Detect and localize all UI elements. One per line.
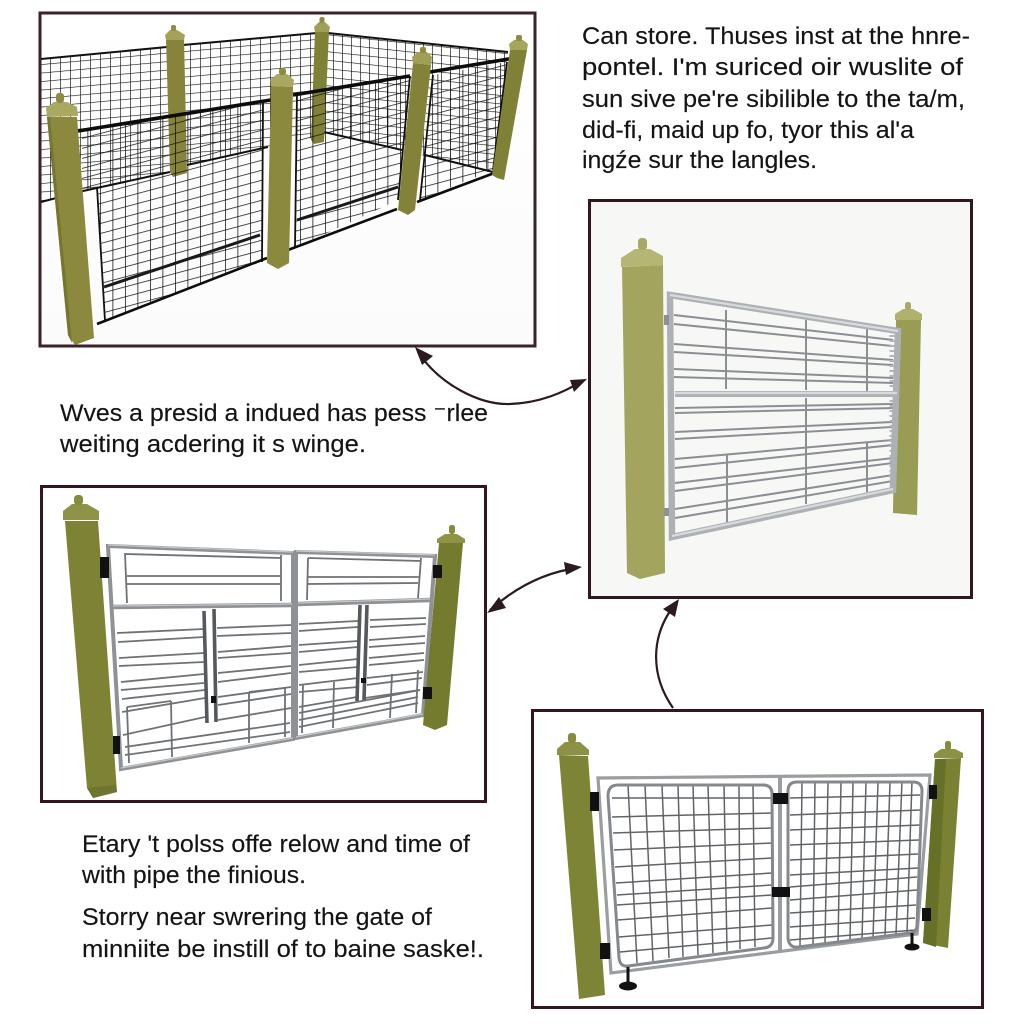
arrow: bottom right panel to gate panel: [656, 599, 679, 708]
panel: double gate with horizontal bars: [42, 486, 486, 802]
text block: middle left: Wves a presid a indued has pess ⁻rlee: [60, 400, 488, 427]
right post: [423, 525, 465, 730]
gate hinges and feet: [590, 785, 937, 990]
right leaf mesh: [790, 781, 920, 946]
text block: middle left: [59, 400, 488, 458]
gate frame: [664, 295, 898, 537]
post front left: [46, 93, 94, 345]
text block: bottom left: Etary 't polss offe relow and time of: [82, 831, 470, 858]
text block: top right: ingźe sur the langles.: [582, 147, 817, 174]
back post left: [165, 25, 187, 177]
text block: top right: sun sive pe're sibilible to the ta/m,: [582, 86, 965, 113]
text block: top right: [582, 23, 970, 174]
text block: bottom left: minniite be instill of to baine saske!.: [82, 936, 484, 963]
text block: top right: pontel. I'm suriced oir wuslite of: [582, 54, 963, 81]
front wire mesh panels: [78, 58, 515, 324]
gate frame and rounded leaves: [598, 775, 930, 973]
panel: wire mesh fence run: [40, 13, 535, 346]
left post: [63, 495, 117, 798]
post centre front: [267, 68, 294, 269]
text block: top right: did-fi, maid up fo, tyor this al'a: [582, 117, 914, 144]
gate frame: [108, 545, 435, 769]
text block: top right: Can store. Thuses inst at the hnre-: [582, 23, 970, 50]
arrow: top panel to gate panel: [415, 347, 587, 404]
text block: middle left: weiting acdering it s winge.: [59, 431, 366, 458]
right post: [923, 741, 963, 948]
right post: [893, 302, 922, 515]
text block: bottom left: Storry near swrering the gate of: [82, 904, 432, 931]
thick centre bars: [204, 605, 367, 723]
back post right: [311, 17, 330, 144]
arrow: lower left panel to gate panel: [487, 562, 582, 613]
post centre right: [398, 47, 432, 215]
gate bars: [117, 553, 426, 763]
panel: single leaf gate: [590, 200, 972, 598]
text block: bottom left: with pipe the finious.: [81, 862, 306, 889]
gate bars: [674, 310, 893, 522]
gate hinges and latches: [100, 557, 442, 754]
left leaf mesh: [612, 785, 772, 963]
panel: double gate with mesh infill: [532, 710, 982, 1008]
left post: [621, 238, 665, 579]
back wire mesh panels: [41, 33, 508, 202]
text block: bottom left: [81, 831, 484, 963]
left post: [557, 733, 605, 999]
post far right: [492, 35, 528, 180]
